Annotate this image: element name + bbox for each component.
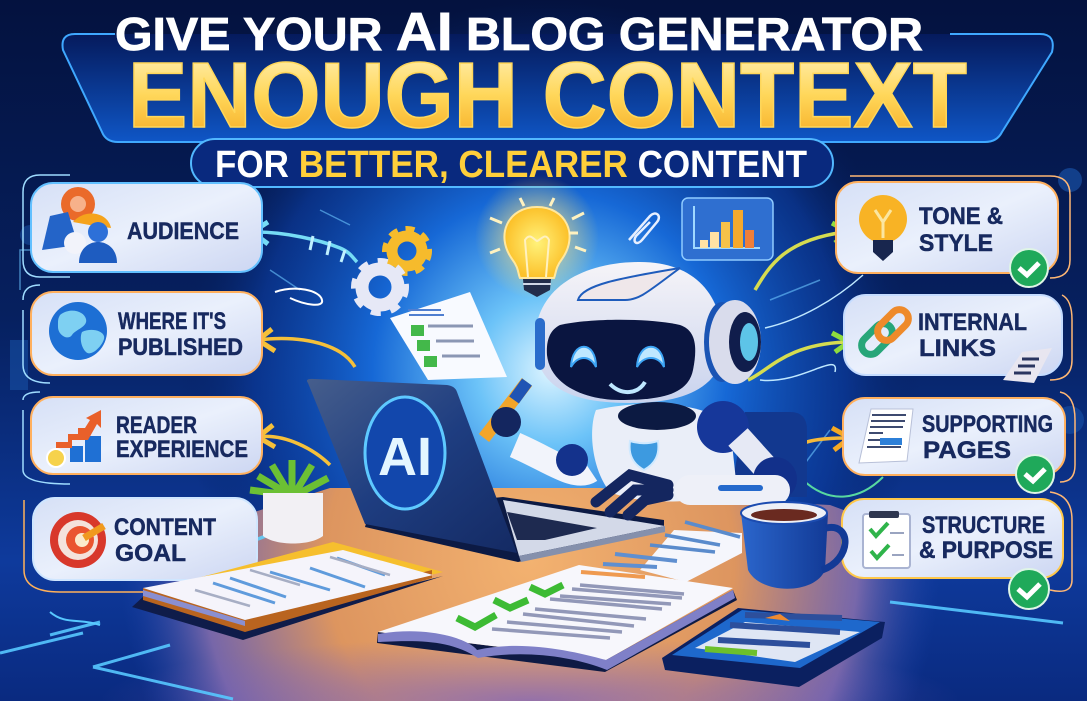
card: internal links (844, 295, 1062, 383)
robot right arm (690, 401, 797, 501)
card: supporting pages: PAGES (923, 437, 1011, 464)
icon: bulb (859, 195, 907, 261)
open document (377, 522, 740, 672)
paperclip (629, 214, 659, 243)
card: reader experience: READER (116, 412, 197, 439)
icon: people (42, 187, 117, 263)
icon: check (1016, 455, 1054, 493)
coffee mug (741, 502, 845, 589)
card: content goal (33, 498, 257, 580)
card: where it's published: PUBLISHED (118, 334, 243, 361)
card: reader experience: EXPERIENCE (116, 436, 248, 463)
icon: note (1003, 348, 1052, 383)
card: structure and purpose: STRUCTURE (922, 512, 1045, 539)
robot ear (704, 300, 761, 384)
card: audience: AUDIENCE (127, 218, 239, 245)
second page of document (640, 530, 742, 582)
robot head (535, 262, 723, 403)
icon: checklist (863, 511, 910, 568)
laptop (307, 379, 665, 562)
arrows (208, 222, 883, 573)
card: tone and style: STYLE (919, 230, 993, 257)
card: tone and style: TONE & (919, 203, 1003, 230)
smartphone (662, 608, 885, 687)
title banner (62, 2, 1053, 147)
plant (250, 460, 328, 544)
icon: chain link (858, 306, 912, 358)
lightbulb (475, 175, 599, 299)
card: where it's published (31, 292, 262, 375)
icon: documents (859, 409, 913, 463)
card: content goal: CONTENT (114, 514, 216, 541)
subtitle pill: FOR BETTER, CLEARER CONTENT (215, 144, 807, 186)
gears (354, 229, 429, 313)
robot (484, 262, 797, 515)
chair (730, 412, 807, 497)
card: internal links: LINKS (919, 335, 996, 362)
card: structure and purpose: & PURPOSE (919, 537, 1053, 564)
notebook left (132, 542, 443, 640)
floating bar chart (682, 198, 773, 260)
card: reader experience (31, 397, 262, 474)
icon: growth chart (47, 410, 101, 467)
laptop: AI (378, 427, 432, 487)
card: tone and style (836, 182, 1058, 287)
card: supporting pages (843, 398, 1065, 493)
icon: target (50, 512, 106, 568)
icon: check (1010, 249, 1048, 287)
card: supporting pages: SUPPORTING (922, 411, 1053, 438)
card: where it's published: WHERE IT'S (118, 308, 226, 335)
icon: globe (49, 302, 107, 360)
robot hand on keyboard (596, 475, 668, 515)
card: audience (31, 183, 262, 272)
icon: check (1009, 569, 1049, 609)
card: structure and purpose (842, 499, 1063, 609)
title line 1: GIVE YOUR AI BLOG GENERATOR (115, 2, 923, 62)
card: internal links: INTERNAL (918, 309, 1027, 336)
desk (0, 488, 1087, 701)
frames behind cards (23, 175, 1075, 592)
card: content goal: GOAL (115, 540, 186, 567)
robot arm with pen (484, 382, 590, 476)
title line 2: ENOUGH CONTEXT (128, 43, 967, 147)
floating checklist (390, 292, 507, 380)
robot torso (592, 404, 737, 502)
